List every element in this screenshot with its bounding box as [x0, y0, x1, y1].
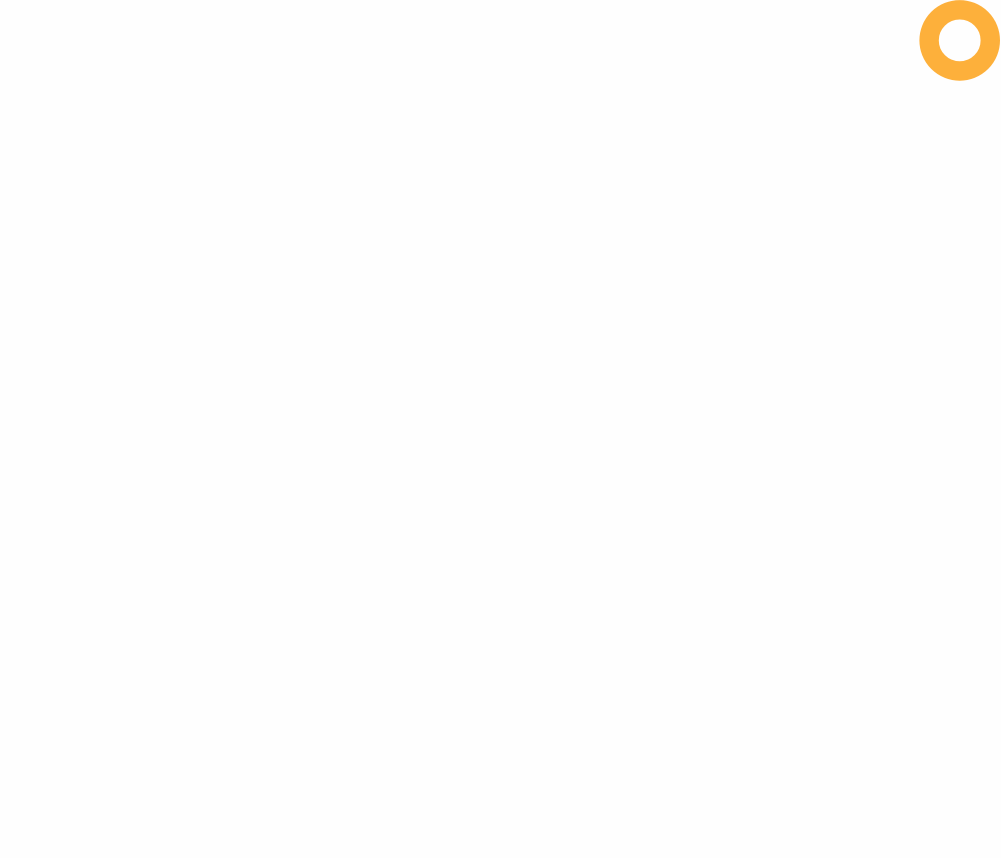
icon: orange ring [929, 10, 990, 71]
